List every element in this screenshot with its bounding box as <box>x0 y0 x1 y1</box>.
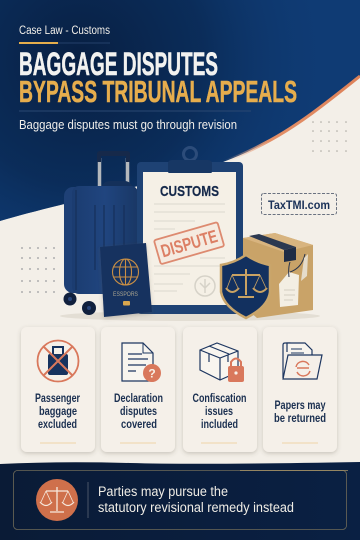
icon: box with padlock <box>200 343 244 382</box>
label <box>274 398 326 425</box>
accent line <box>201 442 237 444</box>
subtitle: Baggage disputes must go through revision <box>19 117 237 132</box>
dot pattern: top right <box>312 121 347 152</box>
label: Passenger <box>35 391 80 405</box>
card 1: passenger baggage <box>21 327 95 452</box>
passport label: ESSPORS <box>113 292 138 298</box>
dot pattern: left <box>21 247 55 293</box>
clipboard clip <box>168 148 212 173</box>
bottom callout band <box>0 462 360 540</box>
label: disputes <box>120 404 157 418</box>
icon: shield with scales <box>221 255 270 318</box>
icon: folder with return arrow <box>283 343 322 379</box>
icon: baggage prohibited <box>38 340 78 382</box>
seal <box>195 276 215 296</box>
callout frame <box>14 470 346 530</box>
icon: clipboard with document <box>137 148 243 314</box>
document lines <box>154 204 225 291</box>
icon: suitcase <box>64 151 138 315</box>
label: Papers may <box>274 398 326 412</box>
brand tag: TaxTMI.com: TaxTMI.com <box>268 198 330 212</box>
accent line <box>120 442 156 444</box>
title rule <box>19 110 251 112</box>
icon: scales in circle <box>36 479 78 521</box>
icon: parcel box <box>243 233 313 318</box>
floor shadow <box>60 311 320 321</box>
callout text: statutory revisional remedy instead <box>98 500 294 515</box>
label: Declaration <box>114 391 163 405</box>
stamp: dispute: DISPUTE <box>159 226 220 261</box>
icon: passport <box>100 243 152 317</box>
brand tag: TaxTMI.com <box>262 194 336 214</box>
label <box>192 391 246 431</box>
document heading: CUSTOMS <box>160 183 219 200</box>
label: Confiscation <box>192 391 246 405</box>
label <box>114 391 163 431</box>
title line 1: BAGGAGE DISPUTES <box>19 46 218 82</box>
callout text: Parties may pursue the <box>98 484 228 499</box>
card 2: declaration disputes <box>101 327 175 452</box>
divider <box>88 482 89 518</box>
label: baggage <box>39 404 77 418</box>
label: be returned <box>274 411 326 425</box>
card 3: confiscation issues <box>183 327 257 452</box>
globe emblem <box>112 259 138 285</box>
label: covered <box>121 417 157 431</box>
callout text <box>98 484 294 515</box>
header navy background <box>0 0 360 221</box>
eyebrow underline <box>19 42 110 44</box>
label <box>35 391 80 431</box>
eyebrow: case law: Case Law - Customs <box>19 25 110 37</box>
label: excluded <box>38 417 77 431</box>
frame highlight <box>240 470 348 471</box>
icon: document with question: ? <box>148 366 156 380</box>
label: issues <box>205 404 233 418</box>
accent line <box>282 442 318 444</box>
label: included <box>201 417 238 431</box>
card 4: papers returned <box>263 327 337 452</box>
accent line <box>40 442 76 444</box>
parcel tag <box>279 254 308 307</box>
